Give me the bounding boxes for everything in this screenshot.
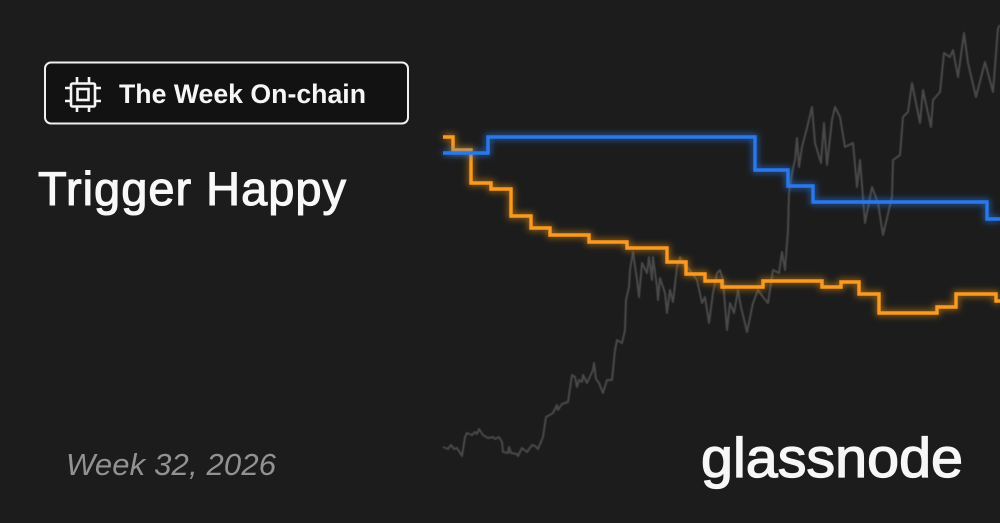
icon: microchip [65,77,101,112]
date label: Week 32, 2026 [66,447,277,482]
title: Trigger Happy [38,162,346,215]
logo: glassnode wordmark: glassnode [701,426,963,489]
grey price line [443,25,1000,456]
blue step line [443,137,1000,219]
chart: price and step lines [443,25,1000,456]
badge: The Week On-chain [45,62,408,124]
badge label: The Week On-chain [119,79,366,109]
orange step line [443,137,1000,313]
